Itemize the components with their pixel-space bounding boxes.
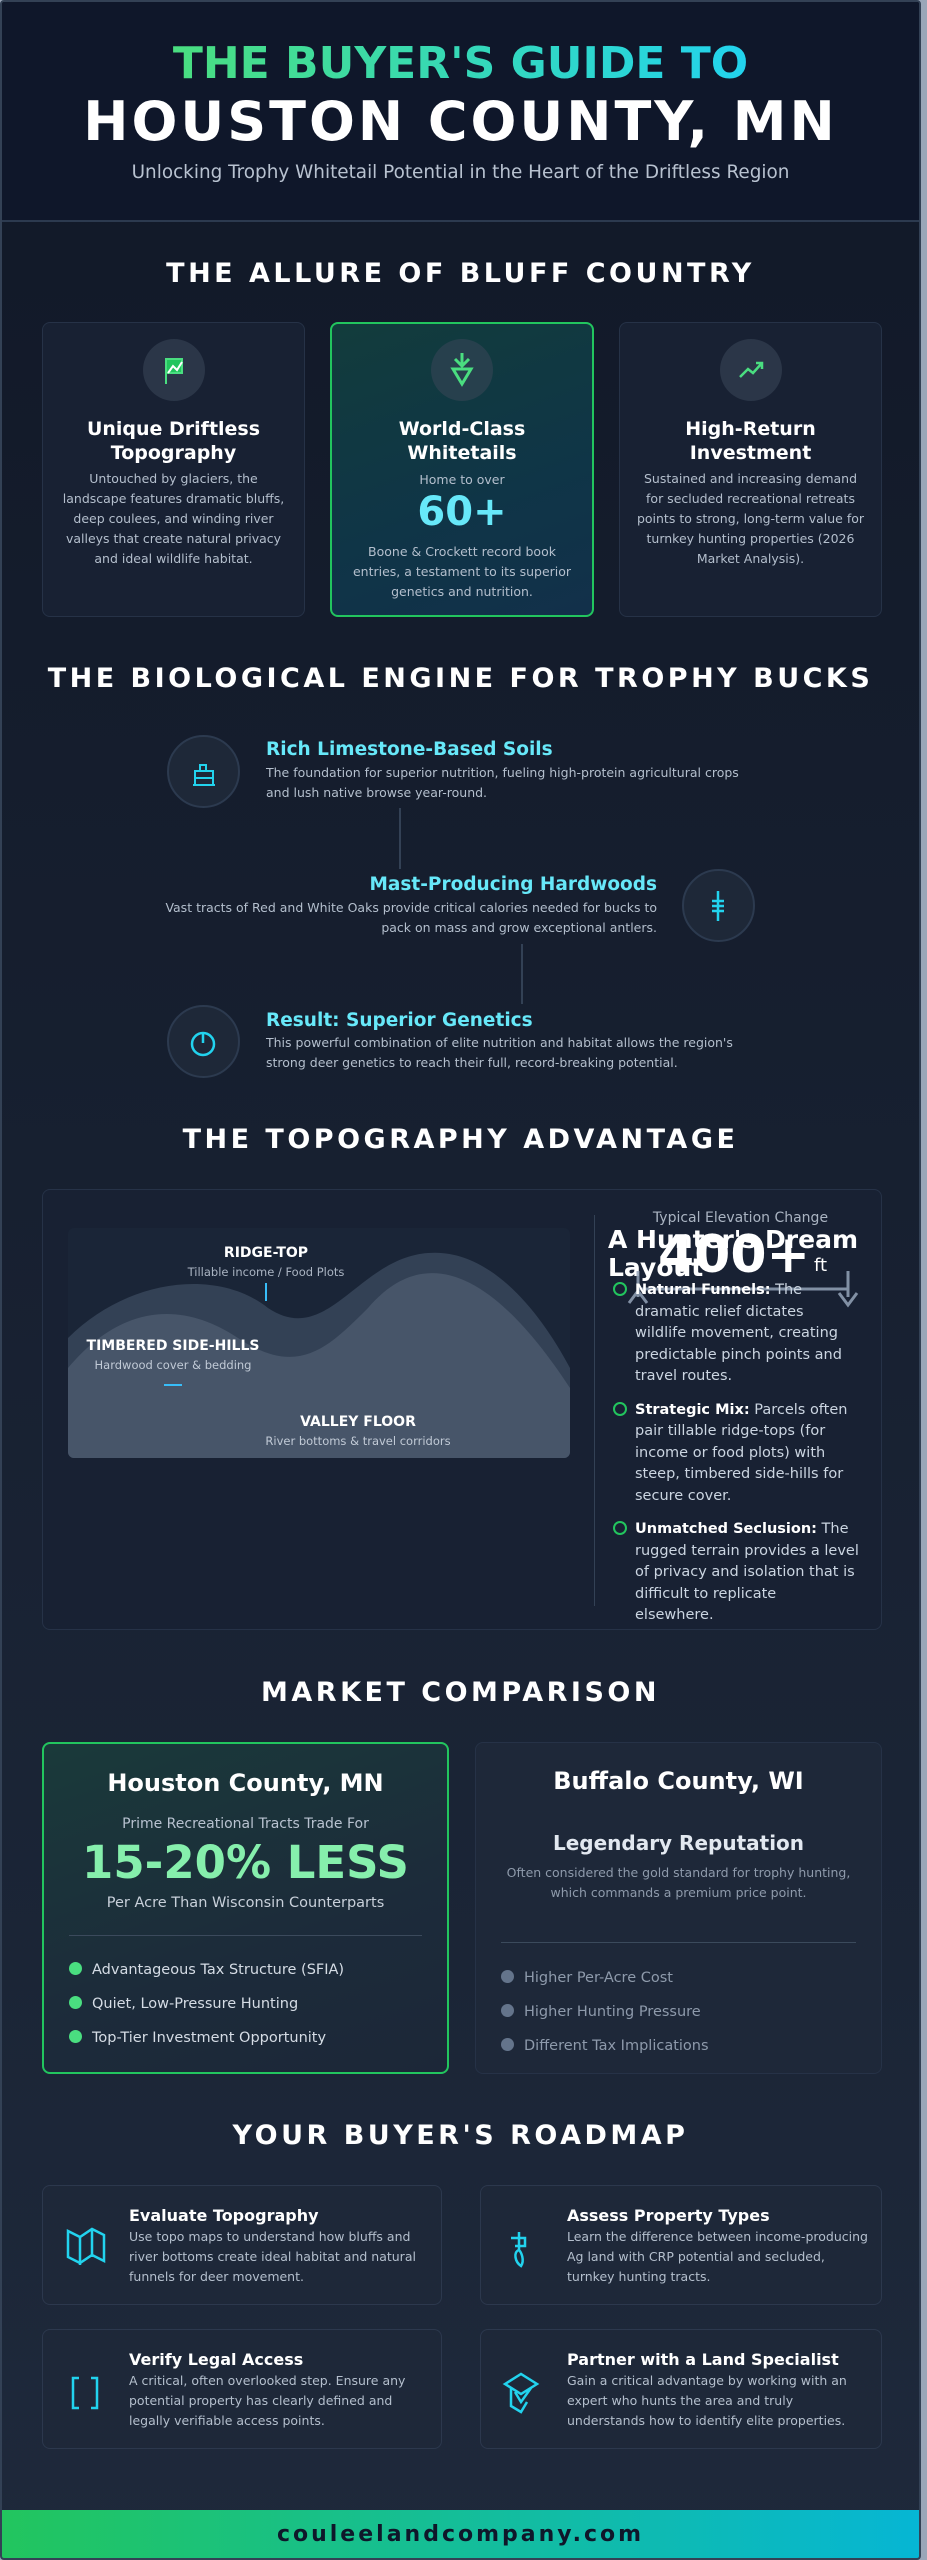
list: Quiet, Low-Pressure Hunting bbox=[92, 1996, 298, 2012]
card title: Investment bbox=[690, 442, 811, 464]
card title: Topography bbox=[111, 442, 236, 464]
card desc: Untouched by glaciers, the landscape features dramatic bluffs, deep coulees, and winding river valleys that create natural privacy and ideal wildlife habitat. bbox=[63, 471, 284, 566]
step: partner with specialist: Gain a critical advantage by working with an expert who hunts the area and truly understands how to identify elite properties. bbox=[567, 2373, 847, 2428]
text: hunter's dream: ft bbox=[814, 1255, 827, 1276]
list: Higher Per-Acre Cost bbox=[524, 1970, 673, 1986]
label: ridge-top bbox=[188, 1245, 344, 1301]
step: evaluate topography: Evaluate Topography bbox=[129, 2206, 319, 2225]
heading: allure: THE ALLURE OF BLUFF COUNTRY bbox=[166, 258, 755, 289]
bullets: Strategic Mix: Parcels often pair tillable ridge-tops (for income or food plots) with steep, timbered side-hills for secure cover. bbox=[635, 1402, 847, 1504]
label: valley bbox=[265, 1414, 451, 1448]
icon: wheat bbox=[682, 869, 755, 942]
footer: couleelandcompany.com bbox=[277, 2522, 644, 2547]
label: valley: VALLEY FLOOR bbox=[300, 1414, 416, 1430]
list: Different Tax Implications bbox=[524, 2038, 709, 2054]
list: Advantageous Tax Structure (SFIA) bbox=[92, 1962, 344, 1978]
title: Houston County, MN bbox=[107, 1769, 384, 1797]
card: houston county: Per Acre Than Wisconsin Counterparts bbox=[107, 1895, 384, 1911]
bullets: Unmatched Seclusion: The rugged terrain provides a level of privacy and isolation that is difficult to replicate elsewhere. bbox=[635, 1521, 859, 1623]
step: partner with specialist bbox=[480, 2329, 882, 2449]
desc: This powerful combination of elite nutrition and habitat allows the region's strong deer genetics to reach their full, record-breaking potential. bbox=[266, 1035, 733, 1070]
label: timbered: TIMBERED SIDE-HILLS bbox=[87, 1338, 259, 1354]
heading: roadmap: YOUR BUYER'S ROADMAP bbox=[233, 2120, 688, 2151]
icon: map bbox=[66, 2228, 106, 2265]
chart: elevation profile bbox=[68, 1228, 570, 1458]
step: evaluate topography bbox=[42, 2185, 442, 2305]
card title bbox=[87, 418, 260, 464]
title: Result: Superior Genetics bbox=[266, 1010, 533, 1031]
card: buffalo county bbox=[475, 1742, 882, 2074]
card: investment bbox=[619, 322, 882, 617]
list bbox=[69, 1962, 344, 2046]
card: whitetails bbox=[330, 322, 594, 617]
desc: The foundation for superior nutrition, fueling high-protein agricultural crops and lush native browse year-round. bbox=[266, 765, 739, 800]
stat: 15-20% LESS bbox=[82, 1836, 409, 1889]
list: Higher Hunting Pressure bbox=[524, 2004, 701, 2020]
card: houston county bbox=[42, 1742, 449, 2074]
title: Rich Limestone-Based Soils bbox=[266, 739, 553, 760]
heading: A Hunter's Dream bbox=[608, 1225, 858, 1254]
subtitle: Unlocking Trophy Whitetail Potential in the Heart of the Driftless Region bbox=[132, 162, 789, 183]
list bbox=[501, 1970, 709, 2054]
card: houston county: Prime Recreational Tracts Trade For bbox=[122, 1816, 369, 1832]
heading bbox=[608, 1225, 858, 1282]
step: assess property types: Learn the difference between income-producing Ag land with CRP potential and secluded, turnkey hunting tracts. bbox=[567, 2229, 868, 2284]
icon: trend bbox=[720, 339, 782, 401]
card: buffalo county: Often considered the gold standard for trophy hunting, which commands a premium price point. bbox=[507, 1865, 850, 1900]
item: hardwoods bbox=[165, 869, 755, 942]
label: valley: River bottoms & travel corridors bbox=[265, 1434, 451, 1448]
card desc: Boone & Crockett record book entries, a testament to its superior genetics and nutrition. bbox=[353, 544, 571, 599]
bullets bbox=[613, 1282, 859, 1623]
card text: Home to over bbox=[419, 472, 505, 487]
label: ridge-top: Tillable income / Food Plots bbox=[188, 1265, 344, 1279]
title: Buffalo County, WI bbox=[553, 1767, 804, 1795]
step: evaluate topography: Use topo maps to understand how bluffs and river bottoms create ideal habitat and natural funnels for deer movement. bbox=[129, 2229, 416, 2284]
icon: power bbox=[167, 1005, 240, 1078]
heading: Layout bbox=[608, 1253, 703, 1282]
label: ridge-top: RIDGE-TOP bbox=[224, 1245, 308, 1261]
text: hunter's dream: 400+ bbox=[658, 1225, 810, 1285]
card title: High-Return bbox=[685, 418, 816, 440]
icon: map chart bbox=[143, 339, 205, 401]
card title: World-Class bbox=[399, 418, 525, 440]
heading: topography: THE TOPOGRAPHY ADVANTAGE bbox=[183, 1124, 738, 1155]
card title: Unique Driftless bbox=[87, 418, 260, 440]
icon: deer bbox=[431, 339, 493, 401]
step: partner with specialist: Partner with a Land Specialist bbox=[567, 2350, 839, 2369]
heading: biological engine: THE BIOLOGICAL ENGINE FOR TROPHY BUCKS bbox=[48, 663, 873, 694]
title line 2: HOUSTON COUNTY, MN bbox=[83, 90, 838, 153]
card title: Whitetails bbox=[407, 442, 517, 464]
step: verify legal access: A critical, often overlooked step. Ensure any potential property has clearly defined and legally verifiable access points. bbox=[129, 2373, 405, 2428]
footer bbox=[2, 2510, 919, 2560]
card: buffalo county: Legendary Reputation bbox=[553, 1831, 804, 1855]
label: timbered bbox=[86, 1338, 259, 1386]
title: Mast-Producing Hardwoods bbox=[370, 874, 657, 895]
step: assess property types: Assess Property Types bbox=[567, 2206, 770, 2225]
stat 60+: 60+ bbox=[417, 489, 507, 535]
header bbox=[2, 2, 919, 222]
list: Top-Tier Investment Opportunity bbox=[92, 2030, 326, 2046]
step: verify legal access bbox=[42, 2329, 442, 2449]
icon: cap bbox=[502, 2372, 540, 2414]
label: timbered: Hardwood cover & bedding bbox=[95, 1358, 251, 1372]
card desc: Sustained and increasing demand for secluded recreational retreats points to strong, long-term value for turnkey hunting properties (2026 Market Analysis). bbox=[637, 471, 864, 566]
text: hunter's dream bbox=[608, 1210, 859, 1623]
card: driftless topography bbox=[42, 322, 305, 617]
elevation stat: Typical Elevation Change bbox=[653, 1210, 828, 1226]
desc: Vast tracts of Red and White Oaks provide critical calories needed for bucks to pack on mass and grow exceptional antlers. bbox=[165, 900, 657, 935]
heading: market comparison: MARKET COMPARISON bbox=[261, 1677, 660, 1708]
panel: topography bbox=[42, 1189, 882, 1630]
item: soils bbox=[167, 735, 739, 808]
bullets: Natural Funnels: The dramatic relief dictates wildlife movement, creating predictable pinch points and travel routes. bbox=[635, 1282, 842, 1384]
item: genetics bbox=[167, 1005, 733, 1078]
icon: soil bbox=[167, 735, 240, 808]
step: assess property types bbox=[480, 2185, 882, 2305]
card title bbox=[399, 418, 525, 464]
title line 1: THE BUYER'S GUIDE TO bbox=[173, 38, 748, 89]
icon: sprout bbox=[511, 2232, 526, 2268]
step: verify legal access: Verify Legal Access bbox=[129, 2350, 303, 2369]
card title bbox=[685, 418, 816, 464]
icon: brackets bbox=[72, 2376, 98, 2410]
